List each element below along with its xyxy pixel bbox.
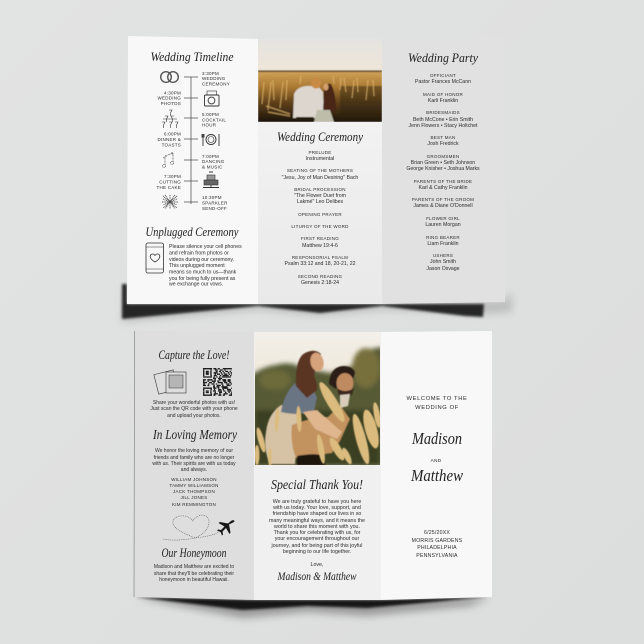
memorial names xyxy=(169,477,219,507)
timeline labels right: SEND-OFF xyxy=(202,206,227,211)
icon: sparkler xyxy=(162,195,178,209)
timeline labels right: CEREMONY xyxy=(202,82,230,86)
party list: USHERS xyxy=(433,253,453,258)
heading: unplugged ceremony: Unplugged Ceremony xyxy=(146,224,239,239)
welcome heading: WELCOME TO THE xyxy=(407,396,467,402)
timeline labels right: 3:30PM xyxy=(202,71,219,76)
date and location xyxy=(412,530,463,559)
icon: place setting xyxy=(202,134,219,146)
party list: George Knisher • Joshua Marks xyxy=(406,166,480,172)
party list: BRIDESMAIDS xyxy=(426,110,460,115)
timeline labels left: WEDDING xyxy=(158,96,181,100)
memorial names: KIM REMMINGTON xyxy=(172,502,216,507)
memorial names: TAMMY WILLIAMSON xyxy=(169,483,219,488)
icon: camera xyxy=(204,91,219,106)
capture text xyxy=(150,400,238,419)
thank you message: We are truly grateful to have you here xyxy=(273,499,361,505)
pampas plumes xyxy=(254,380,382,466)
party list: MAID OF HONOR xyxy=(423,92,463,97)
thank you message: friendship have shaped our lives in so xyxy=(273,511,361,517)
panel: welcome cover xyxy=(381,331,492,600)
icon: music notes xyxy=(162,152,174,168)
ceremony order: "Jesu, Joy of Man Desiring" Bach xyxy=(282,175,358,181)
memorial names: WILLIAM JOHNSON xyxy=(171,477,217,482)
welcome heading: WEDDING OF xyxy=(415,405,459,411)
ceremony order: PRELUDE xyxy=(308,150,332,155)
ceremony order xyxy=(282,150,358,286)
panel: timeline xyxy=(127,36,258,304)
name: Madison: Madison xyxy=(411,429,462,448)
capture text: Share your wonderful photos with us! xyxy=(153,400,235,406)
timeline labels right: HOUR xyxy=(202,122,217,128)
unplugged text: we exchange our vows. xyxy=(169,282,223,288)
memory text: and always. xyxy=(181,467,207,473)
QR code xyxy=(203,369,232,395)
timeline labels right: DANCING xyxy=(202,159,225,164)
date and location: PHILADELPHIA xyxy=(417,545,457,551)
thank you message: world to share this moment with you. xyxy=(274,524,360,530)
timeline labels right: 5:00PM xyxy=(202,112,219,117)
party list: PARENTS OF THE BRIDE xyxy=(414,179,472,184)
timeline labels right: & MUSIC xyxy=(202,164,223,170)
party list xyxy=(406,73,480,272)
party list: Liam Franklin xyxy=(427,241,459,247)
timeline labels left: THE CAKE xyxy=(156,185,181,190)
date and location: PENNSYLVANIA xyxy=(416,553,458,559)
party list: RING BEARER xyxy=(426,235,460,240)
party list: Beth McCone • Erin Smith xyxy=(413,117,473,123)
party list: PARENTS OF THE GROOM xyxy=(412,197,474,202)
date and location: MORRIS GARDENS xyxy=(412,538,463,544)
party list: Pastor Frances McCann xyxy=(415,79,471,85)
party list: BEST MAN xyxy=(431,135,455,140)
ceremony order: "The Flower Duet from xyxy=(294,193,346,199)
heading: capture the love: Capture the Love! xyxy=(158,347,230,362)
thank you message: Love, xyxy=(311,562,323,568)
thank you message: journey, and for being part of this joyful xyxy=(271,543,362,549)
heading: our honeymoon: Our Honeymoon xyxy=(162,545,226,560)
memory text xyxy=(152,448,236,473)
honeymoon text: Madison and Matthew are excited to xyxy=(154,564,234,570)
timeline labels left: 6:00PM xyxy=(164,132,181,136)
honeymoon text: honeymoon in beautiful Hawaii. xyxy=(159,577,229,583)
thank you message: Thank you for celebrating with us, for xyxy=(274,530,361,536)
heading: wedding ceremony: Wedding Ceremony xyxy=(277,129,363,144)
timeline labels left: 7:30PM xyxy=(164,174,181,179)
party list: Josh Fredrick xyxy=(427,141,459,147)
ceremony order: SECOND READING xyxy=(298,274,342,279)
timeline labels right xyxy=(202,71,230,211)
ceremony order: Psalm 33:12 and 18, 20-21, 22 xyxy=(285,261,356,267)
timeline labels right: 10:30PM xyxy=(202,195,222,200)
panel: thank you xyxy=(250,332,384,600)
icon: champagne tower xyxy=(162,110,178,128)
icon: airplane xyxy=(217,520,234,536)
party list: Karli Franklin xyxy=(428,98,458,104)
photo: couple in field xyxy=(258,39,382,122)
ceremony order: Matthew 19:4-6 xyxy=(302,243,338,249)
date and location: 6/25/20XX xyxy=(424,530,450,536)
thank you message: with us today. Your love, support, and xyxy=(273,505,361,511)
timeline labels left: CUTTING xyxy=(159,180,181,184)
icon: phone with heart xyxy=(146,243,164,273)
capture text: and upload your photos. xyxy=(167,413,221,419)
ceremony order: LITURGY OF THE WORD xyxy=(291,224,349,229)
honeymoon text: share that they'll be celebrating their xyxy=(154,571,234,577)
thank you message: beginning to our life together. xyxy=(283,549,351,555)
timeline labels right: SPARKLER xyxy=(202,200,228,206)
thank you message xyxy=(269,499,365,568)
unplugged text: and refrain from photos or xyxy=(169,250,229,256)
ceremony order: Lakmé" Leo Delibes xyxy=(297,199,344,205)
party list: Jason Osvage xyxy=(426,266,460,272)
ceremony order: OPENING PRAYER xyxy=(298,212,342,217)
ceremony order: Instrumental xyxy=(306,156,334,162)
icon: photos xyxy=(154,370,186,394)
capture text: Just scan the QR code with your phone xyxy=(150,406,238,412)
panel: capture, memory, honeymoon xyxy=(134,331,254,600)
heading: in loving memory: In Loving Memory xyxy=(152,428,238,443)
unplugged text: means so much to us—thank xyxy=(169,270,237,276)
photo: piggyback couple xyxy=(255,338,380,465)
icon: cake xyxy=(203,172,219,188)
timeline labels left: PHOTOS xyxy=(161,101,181,106)
ceremony order: BRIDAL PROCESSION xyxy=(294,187,346,192)
unplugged text xyxy=(169,244,242,288)
brochure: inside (top) xyxy=(127,36,505,304)
heading: wedding timeline: Wedding Timeline xyxy=(150,49,234,64)
party list: Lauren Morgan xyxy=(425,222,461,228)
ceremony order: SEATING OF THE MOTHERS xyxy=(287,168,353,173)
panel: wedding party xyxy=(382,36,505,304)
heading: wedding party: Wedding Party xyxy=(408,50,478,65)
party list: FLOWER GIRL xyxy=(426,216,460,221)
party list: Jenn Flowers • Stacy Holtchet xyxy=(408,123,478,129)
timeline labels right: 7:00PM xyxy=(202,154,219,159)
timeline labels left: DINNER & xyxy=(157,137,181,142)
party list: OFFICIANT xyxy=(430,73,456,78)
ceremony order: FIRST READING xyxy=(301,236,339,241)
panel: ceremony xyxy=(258,39,382,304)
ceremony order: RESPONSORIAL PSALM xyxy=(292,255,348,260)
memory text: We honor the loving memory of our xyxy=(155,448,233,454)
unplugged text: videos during our ceremony. xyxy=(169,257,234,263)
honeymoon text xyxy=(154,564,234,583)
memory text: friends and family who are no longer xyxy=(154,455,235,461)
timeline axis xyxy=(184,77,198,204)
brochure: outside (bottom) xyxy=(134,331,492,600)
timeline labels right: WEDDING xyxy=(202,76,226,81)
timeline labels left: 4:30PM xyxy=(164,90,181,96)
icon: rings xyxy=(161,72,178,82)
thank you message: many meaningful ways, and it means the xyxy=(269,518,365,524)
name: Matthew: Matthew xyxy=(410,466,464,485)
timeline labels left: TOASTS xyxy=(162,142,181,148)
ceremony order: Genesis 2:18-24 xyxy=(301,280,339,286)
party list: GROOMSMEN xyxy=(427,154,459,159)
memory text: with us. Their spirits are with us today xyxy=(152,461,236,467)
party list: James & Diane O'Donnell xyxy=(413,203,473,209)
heading: special thank you: Special Thank You! xyxy=(271,478,363,493)
party list: John Smith xyxy=(430,259,456,265)
unplugged text: Please silence your cell phones xyxy=(169,244,242,250)
shadow: bottom brochure xyxy=(135,597,490,618)
timeline labels left xyxy=(156,90,181,190)
memorial names: JILL JONES xyxy=(180,495,208,500)
and: AND xyxy=(430,458,442,464)
signature: Madison & Matthew xyxy=(277,569,356,583)
unplugged text: This unplugged moment xyxy=(169,263,225,269)
shadow: top brochure xyxy=(122,284,512,322)
unplugged text: you for being fully present as xyxy=(169,276,236,282)
thank you message: your encouragement throughout our xyxy=(275,536,359,542)
party list: Karl & Cathy Franklin xyxy=(418,185,468,191)
timeline labels right: COCKTAIL xyxy=(202,118,226,122)
welcome heading xyxy=(407,396,467,411)
memorial names: JACK THOMPSON xyxy=(173,489,215,494)
icon: dotted heart flight path xyxy=(163,515,219,540)
party list: Brian Green • Seth Johnson xyxy=(411,160,475,166)
